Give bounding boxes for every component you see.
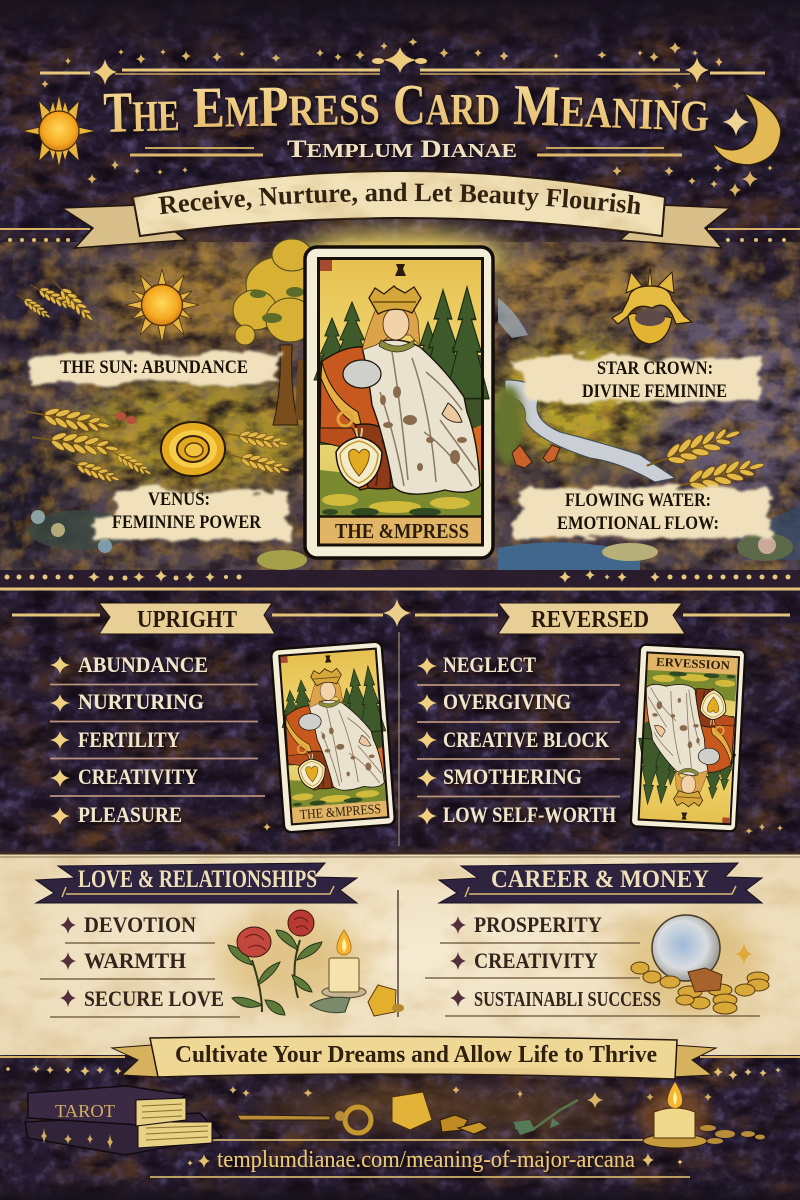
icon: red flowers bbox=[116, 412, 136, 424]
closing rules and dots bbox=[0, 1057, 800, 1177]
banner: reversed: REVERSED bbox=[531, 607, 649, 633]
list: reversed: LOW SELF-WORTH bbox=[443, 802, 616, 827]
title bbox=[103, 72, 711, 145]
list: love: WARMTH bbox=[84, 948, 186, 973]
list: upright: CREATIVITY bbox=[78, 764, 198, 789]
icon: sprig bbox=[513, 1100, 578, 1135]
icon: sun bbox=[125, 269, 199, 343]
label: star crown: STAR CROWN: bbox=[597, 358, 713, 379]
sparkles near reversed card bbox=[263, 823, 783, 834]
icon: header moon bbox=[712, 92, 781, 165]
label: venus bbox=[112, 489, 261, 533]
banner: reversed bbox=[498, 603, 685, 634]
list: love: DEVOTION bbox=[84, 912, 196, 937]
title: CARD bbox=[393, 72, 500, 137]
label: venus: VENUS: bbox=[148, 489, 210, 510]
list: upright: NURTURING bbox=[78, 689, 204, 714]
label bands and icons bbox=[15, 268, 770, 540]
card: reversed small bbox=[631, 644, 745, 832]
icon: wheat upper left bbox=[15, 276, 97, 325]
list: reversed: CREATIVE BLOCK bbox=[443, 727, 609, 752]
banner: love and relationships bbox=[36, 863, 357, 903]
list: reversed bbox=[417, 652, 620, 827]
tree bbox=[233, 239, 314, 425]
card: The Empress main bbox=[305, 247, 493, 558]
icon: star crown bbox=[612, 268, 692, 344]
footer url: templumdianae.com/meaning-of-major-arcana bbox=[217, 1147, 635, 1173]
ribbon: tagline: Receive, Nurture, and Let Beauty Flourish bbox=[158, 182, 640, 214]
banner: career and money: CAREER & MONEY bbox=[491, 866, 709, 893]
icon: wheat right bbox=[642, 420, 767, 501]
icon: wheat lower left bbox=[24, 401, 291, 487]
banner: upright: UPRIGHT bbox=[137, 607, 237, 633]
banner: love and relationships: LOVE & RELATIONSHIPS bbox=[78, 866, 317, 893]
lower greenery bbox=[28, 385, 793, 570]
list: upright: PLEASURE bbox=[78, 802, 182, 827]
sparkles: header bbox=[41, 38, 773, 197]
icon: header sun bbox=[23, 95, 95, 167]
card: upright small bbox=[271, 641, 395, 833]
subtitle: TEMPLUM DIANAE bbox=[287, 136, 517, 163]
ribbon: tagline bbox=[60, 170, 732, 249]
list: upright bbox=[50, 652, 265, 827]
list: career: SUSTAINABLI SUCCESS bbox=[474, 987, 661, 1011]
section: upright and reversed headers bbox=[12, 599, 790, 846]
label: flowing water: FLOWING WATER: bbox=[565, 490, 711, 511]
title: EMPRESS bbox=[192, 72, 380, 140]
list: upright: FERTILITY bbox=[78, 727, 180, 752]
icon: orange pouches bbox=[512, 445, 560, 468]
river bbox=[498, 298, 800, 570]
icon: crystal ball and coins bbox=[631, 915, 769, 1014]
label: star crown bbox=[582, 358, 727, 402]
list: reversed: OVERGIVING bbox=[443, 689, 571, 714]
list: love bbox=[40, 912, 240, 1017]
icon: Venus coin bbox=[161, 422, 225, 476]
side rules under the ribbon bbox=[0, 229, 800, 242]
divider band bbox=[0, 570, 800, 589]
list: career: PROSPERITY bbox=[474, 912, 602, 937]
banner: career and money bbox=[439, 863, 762, 903]
card: reversed small: ERVESSION bbox=[656, 655, 731, 673]
list: career bbox=[425, 912, 760, 1016]
icon: roses bbox=[228, 910, 322, 1015]
icon: footer candle bbox=[639, 1082, 765, 1148]
list: reversed: NEGLECT bbox=[443, 652, 536, 677]
card: upright small: THE &MPRESS bbox=[299, 801, 382, 822]
list: reversed: SMOTHERING bbox=[443, 764, 582, 789]
label: star crown: DIVINE FEMININE bbox=[582, 381, 727, 402]
closing ribbon: Cultivate Your Dreams and Allow Life to Thrive bbox=[175, 1042, 657, 1068]
list: career: CREATIVITY bbox=[474, 948, 598, 973]
banner: upright bbox=[99, 603, 275, 634]
icon: candle bbox=[310, 930, 404, 1016]
label: venus: FEMININE POWER bbox=[112, 512, 261, 533]
label: flowing water bbox=[557, 490, 719, 534]
list: love: SECURE LOVE bbox=[84, 986, 224, 1011]
label: the sun: THE SUN: ABUNDANCE bbox=[60, 357, 248, 378]
label: flowing water: EMOTIONAL FLOW: bbox=[557, 513, 719, 534]
icon: tarot books bbox=[25, 1086, 222, 1155]
card: The Empress main: THE &MPRESS bbox=[335, 519, 469, 543]
closing ribbon bbox=[112, 1036, 716, 1079]
icon: tarot books: TAROT bbox=[55, 1101, 115, 1121]
icon: gold block and nuggets bbox=[392, 1092, 488, 1134]
header rule bbox=[40, 47, 765, 85]
title: MEANING bbox=[513, 72, 711, 144]
panel: parchment bbox=[0, 852, 800, 1055]
panel: landscape scene bbox=[0, 232, 800, 570]
icon: key bbox=[237, 1107, 371, 1133]
title: THE bbox=[103, 78, 180, 145]
list: upright: ABUNDANCE bbox=[78, 652, 208, 677]
